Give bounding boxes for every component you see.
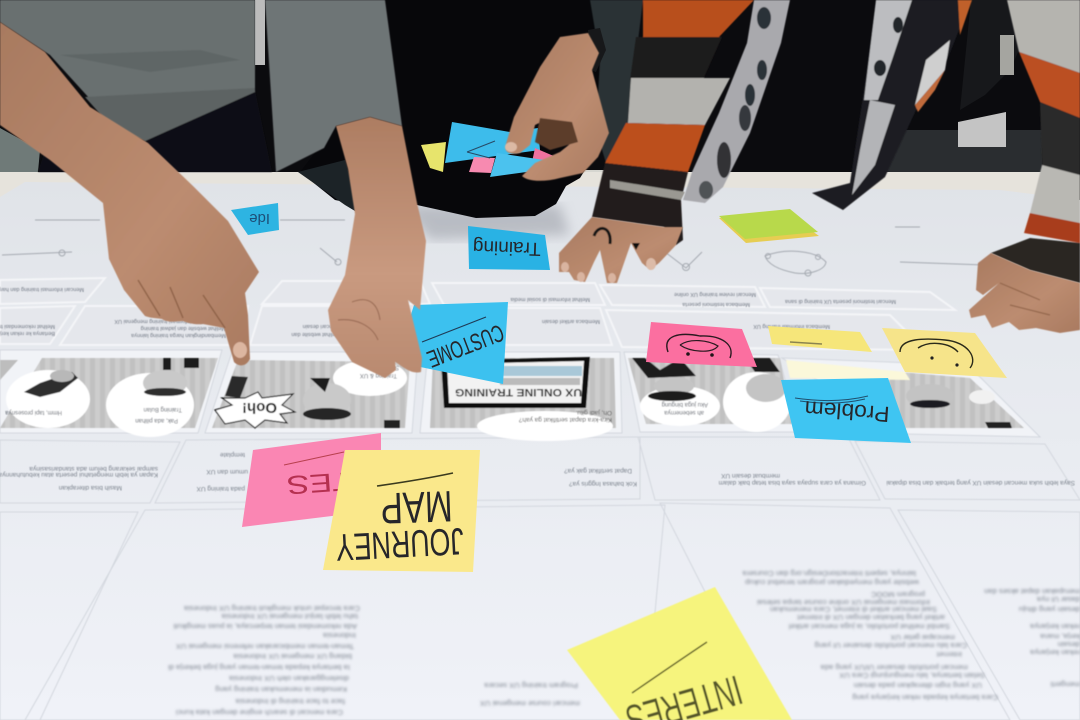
grey sleeve <box>265 0 402 172</box>
printed bullets: lower right column: mencari portofolio desainer UI/UX yang ada <box>820 663 968 672</box>
sticky note: blue problem <box>781 378 911 443</box>
hand: holding notes <box>505 33 609 181</box>
printed bullets: lower right column: rekan kerjanya <box>1029 622 1080 631</box>
comic panel 1: two characters: Pak, ada pilihan <box>135 417 178 423</box>
printed bullets: lower left column: Kemudian ia menemukan training yang <box>215 685 347 694</box>
comic panel 1: two characters <box>0 358 218 437</box>
printed captions, mid row: Masih bisa diterapkan <box>58 484 122 491</box>
printed bullets: lower right column: Saat mencari artikel di internet, Cara menemukan <box>770 605 937 614</box>
printed bullets: lower right column: mencari course mengenai UX <box>480 699 580 708</box>
comic panel 4: characters under notes: Aku juga bingung <box>662 401 708 407</box>
sticky note: pink, partly covered: TES <box>286 466 354 501</box>
printed bullets: lower right column: artikel yang berkaitan dengan UX di internet <box>796 613 945 622</box>
printed bullets: lower right column: lainnya, seperti InteractionDesign.org dan Coursera <box>742 569 916 578</box>
patterned scarf right <box>812 0 972 210</box>
printed bullets: lower right column: desain <box>1058 640 1080 649</box>
printed template: comic row and lower cells <box>0 350 1080 720</box>
comic panel 3: UX online training screen: Kira-kira dapat sertifikat ga yah? <box>518 416 612 423</box>
printed captions, mid row: Kok bahasa Inggris ya? <box>569 480 637 487</box>
small captions in upper rows: Membaca testimoni peserta <box>682 301 750 307</box>
printed bullets: lower left column: diselenggarakan oleh UX Indonesia <box>228 674 349 683</box>
printed bullets: lower left column: face to face training di Indonesia <box>235 697 345 706</box>
sticky note: cyan training: Training <box>472 236 541 259</box>
printed captions, mid row: template <box>220 451 245 458</box>
comic panel 3: UX online training screen: UX ONLINE TRAINING <box>455 386 582 398</box>
printed bullets: lower right column: mengerti <box>1050 680 1080 689</box>
printed captions, mid row: Gimana ya cara supaya saya bisa tetap baik dalam <box>719 479 866 486</box>
comic panel 2: Ooh exclamation: Training & UX <box>360 372 397 378</box>
printed bullets: lower right column: Sambil melihat portofolio, ia juga mencari artikel <box>788 622 950 631</box>
printed bullets: lower right column: mencapai gelar UX <box>890 633 955 642</box>
watch strap <box>588 28 606 72</box>
sticky note: yellow folded flap <box>768 326 872 352</box>
sticky pad: lime <box>719 209 819 243</box>
sticky note: cyan small top-left: Ide <box>249 210 270 227</box>
dark patch under grey sleeve <box>298 160 360 214</box>
soft shadow under centre person <box>400 205 570 240</box>
comic panel 1: two characters: Training Bulan <box>144 406 182 412</box>
printed bullets: lower left column: Indonesia <box>322 631 356 640</box>
printed bullets: lower right column: UX yang ingin diterapkan pada desain <box>854 681 982 690</box>
comic panel 2: Ooh exclamation: Ooh! <box>242 399 277 416</box>
small captions in upper rows: Membaca informasi training UX <box>753 323 830 329</box>
printed captions, mid row: pada training UX <box>196 485 245 492</box>
patterned scarf left <box>683 0 790 203</box>
printed captions, mid row: umum dan UX <box>206 468 248 475</box>
printed bullets: lower left column: Ada rekomendasi teman terpercaya, ia puas mengikuti <box>173 622 357 631</box>
small captions in upper rows: Mendapatkan informasi training mengenai UX <box>114 318 226 324</box>
printed bullets: lower left column: tahu lebih lanjut mengenai UX Indonesia <box>221 612 358 621</box>
hand: far right <box>969 253 1080 333</box>
printed bullets: lower left column: Cara tercepat untuk mengikuti training UX Indonesia <box>183 604 360 613</box>
printed template: upper cell rows <box>0 278 955 350</box>
comic panel 2: Ooh exclamation: Seperti UX <box>370 364 399 370</box>
printed captions, mid row: Dapat sertifikat gak ya? <box>564 467 632 474</box>
person left: grey sweater <box>0 0 272 172</box>
printed captions, mid row: Saya lebih suka mencari desain UX yang terbaik dan bisa dipakai <box>886 479 1075 486</box>
printed bullets: lower right column: informasi mengenai UX online course tanpa selesai <box>757 598 930 607</box>
sticky note: pink, partly covered <box>242 433 381 527</box>
printed bullets: lower right column: Program training UX secara <box>484 681 578 690</box>
sticky note: yellow journey map: MAP <box>380 481 453 532</box>
small captions in upper rows: Melihat website dan <box>291 331 340 337</box>
printed bullets: lower right column: Cara bertanya kepada rekan kerjanya yang <box>852 693 998 702</box>
held notes bundle <box>421 122 578 177</box>
printed bullets: lower left column <box>168 604 360 717</box>
person far right: striped sleeve <box>991 0 1080 283</box>
comic panel 4: characters under notes <box>628 358 792 432</box>
small captions in upper rows: Mencari review training UX online <box>674 291 756 297</box>
small captions in upper rows: Melihat informasi di sosial media <box>510 296 590 302</box>
small captions in upper rows: Melihat website dan jadwal training <box>141 325 226 331</box>
sticky note: yellow interest <box>567 587 792 720</box>
printed template: line drawings along the top <box>2 220 985 276</box>
sticky note: cyan small top-left <box>231 203 279 235</box>
sticky note: cyan training <box>468 226 550 270</box>
comic panel 5: characters under notes <box>785 360 1024 428</box>
sticky note: pink smiley <box>646 322 757 367</box>
hand: resting on table with ring <box>559 217 683 283</box>
arm: left person pointing <box>0 22 259 365</box>
table edge strip <box>0 172 1045 200</box>
printed bullets: lower right column: Cara lalu mencari portofolio desainer UI yang <box>815 641 967 650</box>
small captions in upper rows: Mencari testimoni peserta UX training di sana <box>784 298 896 304</box>
printed bullets: lower left column: Teman-teman membicarakan referensi mengenai UX <box>176 642 354 651</box>
small captions in upper rows: Membaca artikel desain <box>542 318 600 324</box>
sticky note: yellow smiley <box>882 328 1007 378</box>
sticky note: yellow journey map: JOURNEY <box>335 519 465 568</box>
printed bullets: lower right column: program MOOC <box>870 590 925 599</box>
sticky note: yellow journey map <box>323 450 480 572</box>
arm: centre person placing note <box>328 117 426 378</box>
printed captions, mid row: sampai sekarang belum ada standarisasinya <box>29 465 158 472</box>
sticky note: cyan customer: CUSTOME <box>423 318 508 372</box>
printed captions, mid row: Kapan ya lebih mengetahui peserta atau kebutuhannya <box>0 471 158 478</box>
comic panel 3: UX online training screen: Oh, jadi gitu. <box>575 409 612 416</box>
table paper sheet <box>0 182 1080 720</box>
comic panel 3: UX online training screen <box>430 357 616 441</box>
small captions in upper rows <box>0 286 896 338</box>
printed bullets: lower left column: bidang UX mengenai UX Indonesia <box>233 652 352 661</box>
printed captions, mid row: membuat desain UX <box>720 472 780 479</box>
printed captions, mid row <box>0 451 1075 492</box>
printed bullets: lower right column: internet <box>936 650 962 659</box>
comic panel 2: Ooh exclamation <box>212 360 410 428</box>
comic panel 4: characters under notes: ah sebenernya <box>664 409 704 415</box>
small captions in upper rows: Mencari desain <box>303 323 340 329</box>
printed bullets: lower right column <box>480 569 1080 708</box>
sticky note: blue problem: Problem <box>804 396 890 427</box>
printed bullets: lower right column: dasar UI nya <box>1036 595 1080 604</box>
comic panel 1: two characters: Hmm, tapi prosesnya <box>5 409 62 415</box>
small captions in upper rows: Membandingkan harga training lainnya <box>130 332 226 338</box>
person right: striped sleeve <box>590 0 754 245</box>
background behind the table <box>0 0 1080 200</box>
printed bullets: lower right column: Selain bertanya, lalu mengunjungi Cara UX <box>839 671 985 680</box>
printed bullets: lower right column: kerja, mana <box>1040 632 1080 641</box>
printed bullets: lower left column: Ia bertanya kepada teman-teman yang juga bekerja di <box>168 663 350 672</box>
printed bullets: lower right column: rekan kerjanya <box>1029 648 1080 657</box>
printed bullets: lower right column: desain yang dituju <box>1019 605 1080 614</box>
printed bullets: lower right column: merupakan dapat akses dan <box>984 587 1080 596</box>
printed bullets: lower left column: Cara mencari di search engine dengan kata kunci <box>176 708 343 717</box>
printed bullets: lower right column: website yang menyediakan program tersebut cukup <box>745 578 920 587</box>
person centre: dark clothing <box>300 0 610 218</box>
